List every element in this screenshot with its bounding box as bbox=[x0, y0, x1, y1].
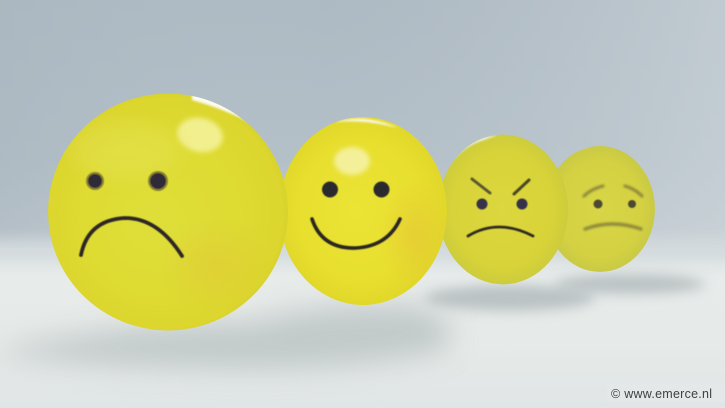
ball shadows on floor bbox=[0, 274, 705, 370]
ball 4: worried face bbox=[558, 146, 655, 272]
ball 2: smiling face bbox=[279, 117, 451, 305]
background wall bbox=[0, 0, 725, 262]
watermark: www.emerce.nl: © www.emerce.nl bbox=[611, 387, 712, 401]
floor bbox=[0, 240, 725, 408]
frown and eyes bbox=[81, 171, 182, 256]
watermark: www.emerce.nl bbox=[607, 384, 725, 402]
smile and eyes bbox=[312, 182, 400, 248]
ball 1: sad face bbox=[48, 93, 288, 330]
ball 3: angry face bbox=[438, 134, 568, 284]
